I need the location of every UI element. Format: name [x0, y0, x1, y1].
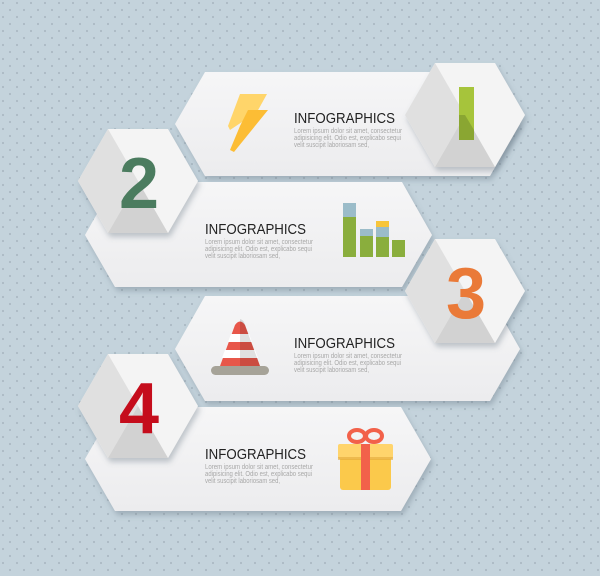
text block 2: adipisicing elit. Odio est, explicabo sequi [205, 246, 312, 253]
text block 1: adipisicing elit. Odio est, explicabo sequi [294, 135, 401, 142]
text block 3: INFOGRAPHICS [294, 335, 395, 352]
bar chart icon [343, 203, 405, 257]
number 2: 2 [119, 144, 159, 224]
number 3: 3 [446, 254, 486, 334]
text block 3: adipisicing elit. Odio est, explicabo sequi [294, 360, 401, 367]
banner 1 [175, 72, 520, 176]
text block 4: velit suscipit laboriosam sed, [205, 478, 280, 485]
text block 1: INFOGRAPHICS [294, 110, 395, 127]
number 4: 4 [119, 369, 159, 449]
text block 4 [205, 446, 314, 485]
text block 1: Lorem ipsum dolor sit amet, consectetur [294, 128, 403, 135]
hexagon 4 with number 4 [78, 354, 198, 458]
text block 2: Lorem ipsum dolor sit amet, consectetur [205, 239, 314, 246]
text block 2: INFOGRAPHICS [205, 221, 306, 238]
hexagon 3 with number 3 [405, 239, 525, 343]
banner 4 [85, 407, 431, 511]
icon: lightning [228, 94, 268, 152]
text block 1: velit suscipit laboriosam sed, [294, 142, 369, 149]
text block 4: INFOGRAPHICS [205, 446, 306, 463]
banner 3 [175, 296, 520, 401]
text block 2: velit suscipit laboriosam sed, [205, 253, 280, 260]
text block 3 [294, 335, 403, 374]
hexagon 2 with number 2 [78, 129, 198, 233]
text block 3: Lorem ipsum dolor sit amet, consectetur [294, 353, 403, 360]
text block 3: velit suscipit laboriosam sed, [294, 367, 369, 374]
text block 2 [205, 221, 314, 260]
number 1 [459, 87, 474, 140]
text block 1 [294, 110, 403, 149]
text block 4: adipisicing elit. Odio est, explicabo sequi [205, 471, 312, 478]
hexagon 1 with number 1 [405, 63, 525, 167]
icon: gift [338, 430, 393, 490]
banner 2 [85, 182, 432, 287]
text block 4: Lorem ipsum dolor sit amet, consectetur [205, 464, 314, 471]
icon: traffic cone [211, 319, 269, 375]
